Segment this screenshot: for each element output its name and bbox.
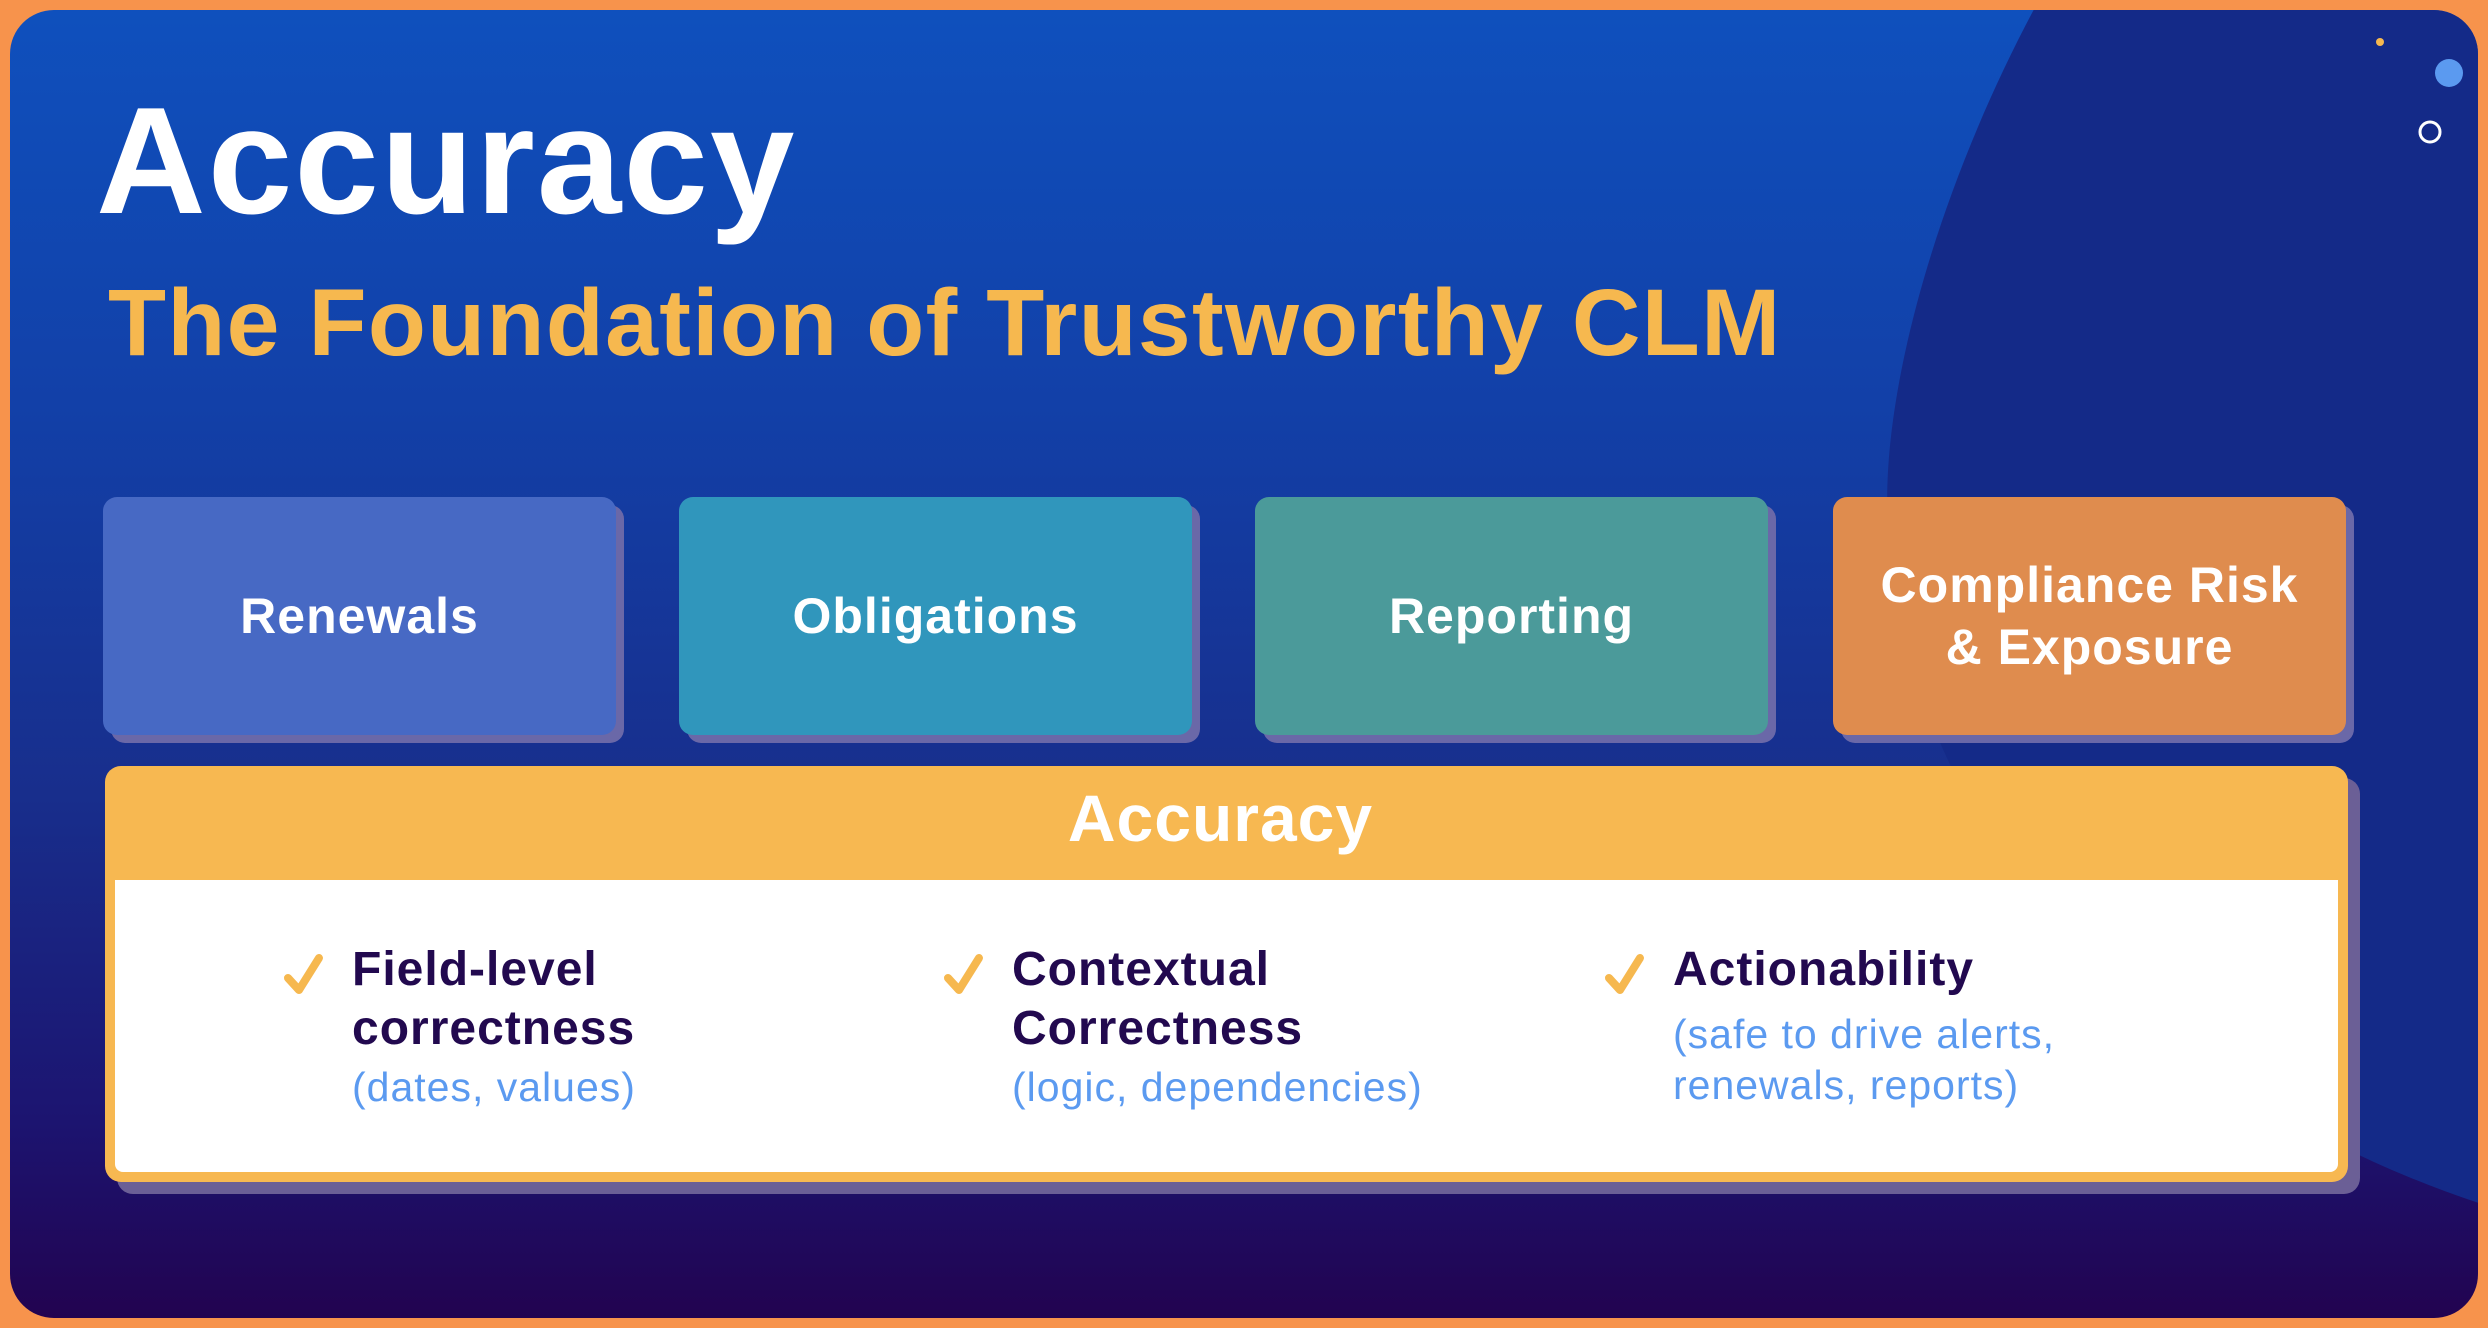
panel body: (safe to drive alerts, [1673,1011,2055,1057]
box: Renewals: Renewals [240,588,479,644]
box: Renewals [103,497,616,735]
subtitle: The Foundation of Trustworthy CLM [108,270,1782,376]
item: contextual correctness [944,943,1423,1110]
panel body: (dates, values) [352,1064,636,1110]
item: field-level correctness [284,943,636,1110]
box: Reporting: Reporting [1389,588,1634,644]
box: Obligations: Obligations [792,588,1078,644]
box: Compliance Risk & Exposure: Compliance Risk [1881,557,2298,613]
box: Compliance Risk & Exposure: & Exposure [1946,619,2233,675]
panel heading: Accuracy [1068,781,1373,855]
icon: decorative dots [2376,38,2463,144]
panel: accuracy foundation [105,766,2348,1182]
panel body: Field-level [352,943,598,996]
box: Compliance Risk & Exposure [1833,497,2346,735]
panel body: renewals, reports) [1673,1062,2019,1108]
panel body [115,880,2338,1172]
title: Accuracy [96,76,796,246]
box: Reporting [1255,497,1768,735]
item: actionability [1605,943,2055,1108]
panel body: Actionability [1673,943,1974,996]
box: Obligations [679,497,1192,735]
panel body: correctness [352,1002,635,1055]
panel body: (logic, dependencies) [1012,1064,1423,1110]
panel body: Contextual [1012,943,1270,996]
panel body: Correctness [1012,1002,1303,1055]
